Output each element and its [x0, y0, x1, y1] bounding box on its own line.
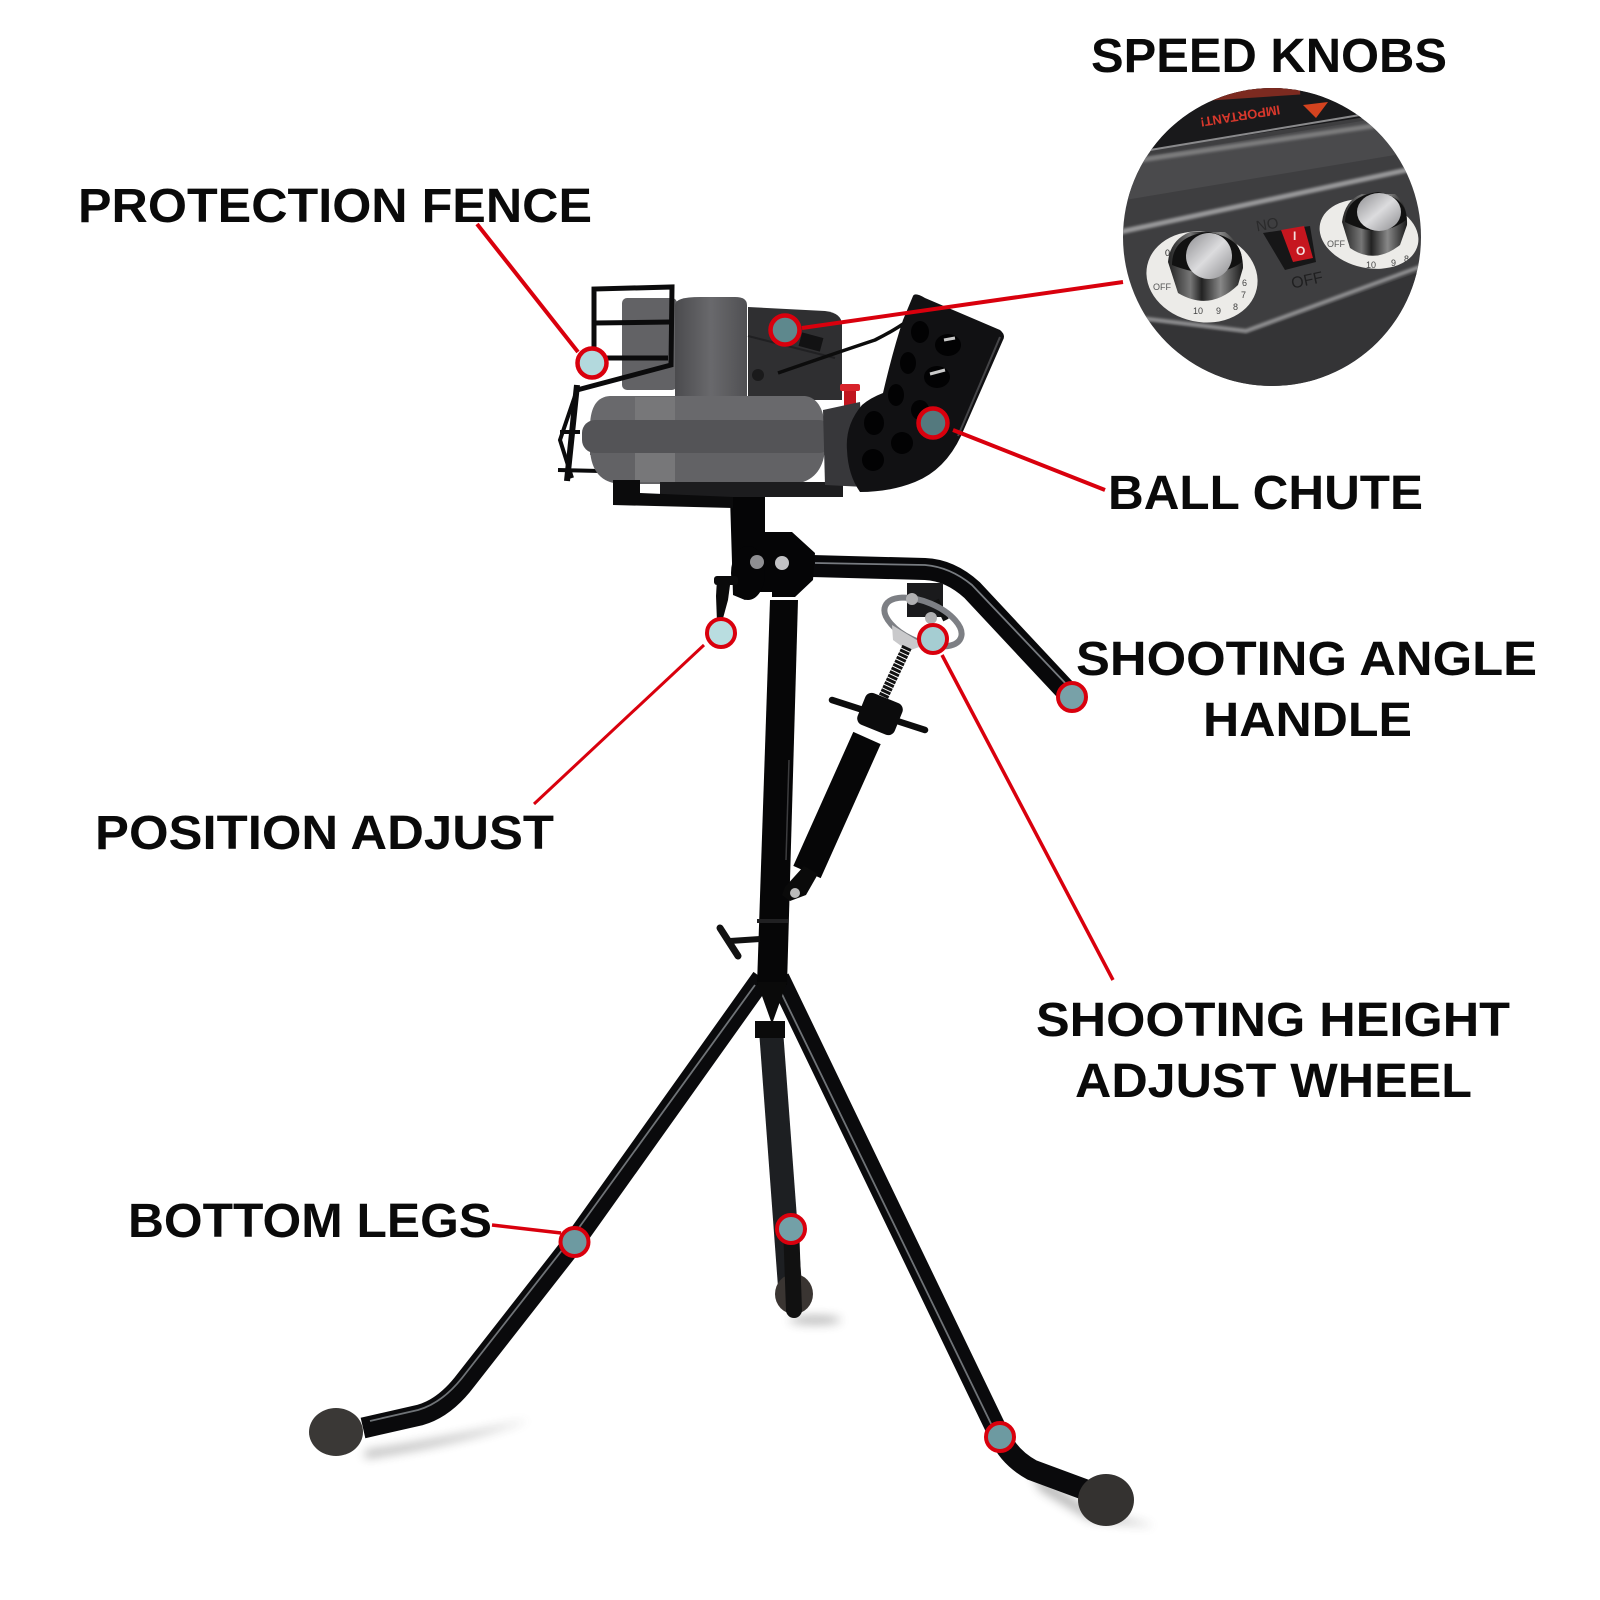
right leg — [778, 978, 1134, 1526]
power cable — [778, 312, 918, 373]
callout line: position adjust — [534, 645, 704, 804]
callout line: speed knobs — [802, 282, 1123, 328]
machine stand — [309, 497, 1134, 1526]
wheel housing — [582, 396, 843, 508]
height adjust wheel and screw — [782, 583, 969, 901]
angle handle tube — [812, 563, 1072, 697]
warning panel: IMPORTANT! — [1199, 102, 1281, 130]
callout line: shooting height — [942, 655, 1113, 980]
warning panel — [1150, 88, 1362, 151]
left speed knob — [1146, 232, 1258, 322]
left speed knob: 0 — [1165, 248, 1170, 258]
marker: back leg — [777, 1215, 805, 1243]
left leg — [309, 978, 762, 1456]
panel ridges — [1128, 120, 1396, 200]
title: position adjust: POSITION ADJUST — [95, 807, 554, 860]
left speed knob: 10 — [1193, 306, 1203, 316]
marker: ball chute — [918, 408, 948, 438]
marker: speed knobs — [770, 316, 800, 344]
left speed knob: OFF — [1153, 282, 1171, 292]
title: shooting height adjust wheel: SHOOTING HEIGHT — [1036, 994, 1510, 1047]
title: shooting angle handle — [1076, 633, 1537, 747]
marker: right leg — [986, 1423, 1014, 1451]
pivot bracket — [714, 497, 815, 622]
right speed knob: 10 — [1366, 260, 1376, 270]
marker: height wheel — [919, 625, 947, 653]
title: bottom legs: BOTTOM LEGS — [128, 1195, 492, 1248]
right speed knob: 8 — [1404, 254, 1409, 264]
pitching machine head — [558, 287, 1004, 508]
leg clamp knob — [720, 928, 760, 956]
left speed knob: 7 — [1241, 290, 1246, 300]
title: shooting height adjust wheel: ADJUST WHEEL — [1075, 1055, 1472, 1108]
left speed knob: 8 — [1233, 302, 1238, 312]
ball chute — [847, 294, 1004, 492]
title: protection fence: PROTECTION FENCE — [78, 180, 592, 233]
red stop knob — [840, 384, 860, 406]
rocker switch: OFF — [1290, 269, 1325, 292]
right speed knob: 9 — [1391, 258, 1396, 268]
callout line: protection fence — [477, 224, 578, 352]
marker: protection fence — [578, 348, 606, 378]
rocker switch — [1256, 218, 1322, 288]
title: ball chute: BALL CHUTE — [1108, 467, 1423, 520]
left speed knob: 9 — [1216, 306, 1221, 316]
connector housing — [823, 402, 865, 487]
back leg — [755, 1021, 813, 1314]
callout line: ball chute — [953, 430, 1105, 490]
central column — [757, 600, 798, 1024]
title: shooting height adjust wheel — [1036, 994, 1510, 1108]
title: shooting angle handle: SHOOTING ANGLE — [1076, 633, 1537, 686]
marker: angle handle — [1058, 683, 1086, 711]
right speed knob: OFF — [1327, 239, 1345, 249]
rocker switch: I — [1293, 229, 1296, 243]
title: speed knobs: SPEED KNOBS — [1091, 30, 1447, 83]
rocker switch: O — [1296, 244, 1305, 258]
title: shooting angle handle: HANDLE — [1203, 694, 1412, 747]
callout line: bottom legs — [492, 1225, 561, 1233]
motor cylinder — [675, 297, 747, 405]
control box — [748, 307, 842, 400]
right speed knob — [1320, 192, 1418, 269]
marker: position adjust — [707, 619, 735, 647]
speed knobs detail circle — [1120, 85, 1425, 390]
floor shadows — [365, 1316, 1155, 1526]
protection fence — [558, 287, 677, 481]
rocker switch: ON — [1254, 213, 1280, 234]
marker: left leg — [560, 1228, 588, 1256]
left speed knob: 6 — [1242, 278, 1247, 288]
